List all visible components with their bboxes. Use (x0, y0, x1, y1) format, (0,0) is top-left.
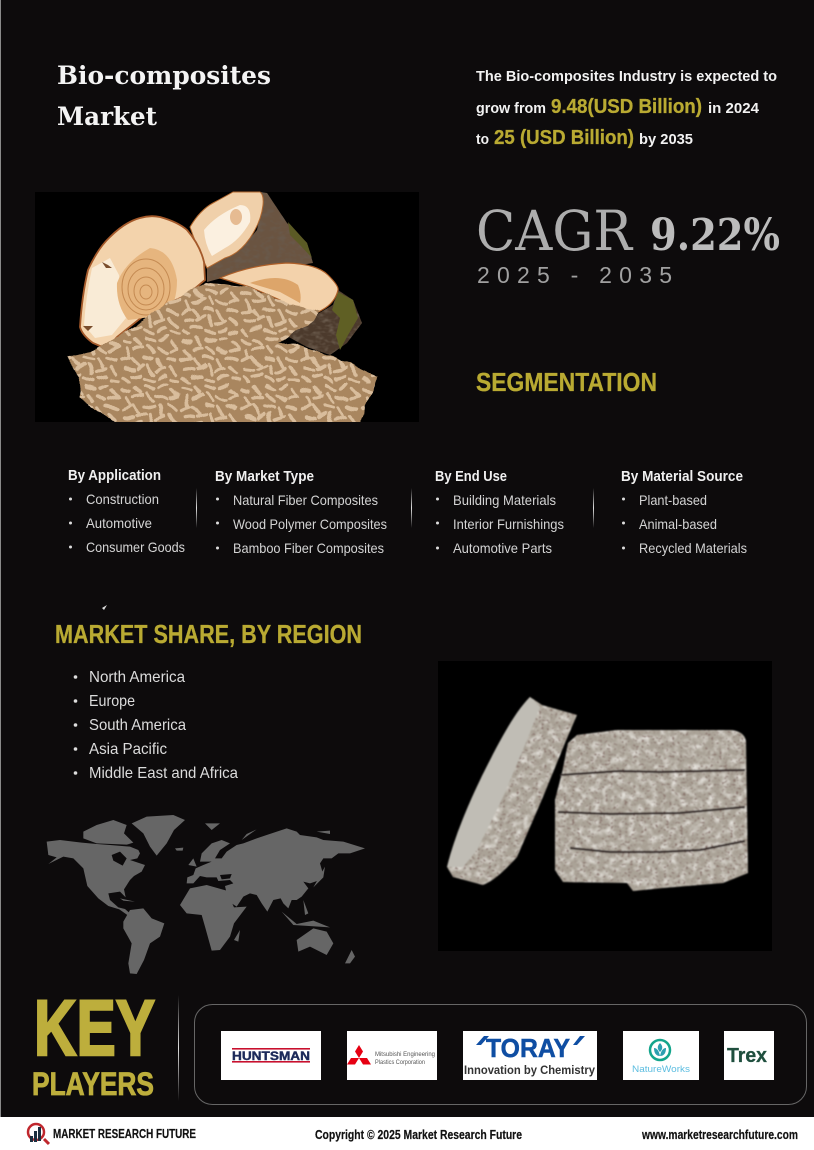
market size statement: to (476, 131, 489, 148)
logo: Mitsubishi Engineering Plastics (347, 1031, 437, 1080)
segment: by application: Consumer Goods (86, 539, 185, 555)
segment: by application (68, 467, 185, 555)
logo: Trex (724, 1031, 774, 1080)
segment: by material source: By Material Source (621, 468, 743, 485)
segment: by material source: Plant-based (639, 492, 707, 508)
segment: by material source: Recycled Materials (639, 540, 747, 556)
world map (47, 815, 365, 974)
segment: by end use: Interior Furnishings (453, 516, 564, 532)
footer: MARKET RESEARCH FUTURE (53, 1127, 196, 1141)
heading: market share by region: MARKET SHARE, BY REGION (55, 619, 362, 649)
key players panel (194, 1004, 806, 1104)
region list: Asia Pacific (89, 741, 167, 758)
icon: market research future (28, 1124, 49, 1144)
logo: Toray: TORAY (486, 1033, 570, 1063)
market size statement: 25 (USD Billion) (494, 127, 634, 149)
segment: by end use: By End Use (435, 468, 507, 485)
segment: by market type: Wood Polymer Composites (233, 516, 387, 532)
segment: by application: Automotive (86, 515, 152, 531)
region list: South America (89, 717, 186, 734)
logo: Huntsman (221, 1031, 321, 1080)
heading: segmentation: SEGMENTATION (476, 367, 657, 397)
segment: by market type: By Market Type (215, 468, 314, 485)
footer (0, 1117, 814, 1150)
market size statement: by 2035 (639, 131, 693, 148)
region list: Middle East and Africa (89, 765, 238, 782)
key players heading: PLAYERS (32, 1066, 154, 1102)
left log slice (80, 216, 205, 349)
market size statement: 9.48(USD Billion) (551, 96, 702, 118)
segment: by market type (215, 468, 387, 556)
image: wood logs and pellets (35, 190, 425, 434)
market size statement: grow from (476, 100, 546, 117)
logo: Mitsubishi Engineering Plastics: Plastics Corporation (375, 1060, 425, 1066)
market size statement: The Bio-composites Industry is expected to (476, 68, 777, 85)
market size statement: in 2024 (708, 100, 760, 117)
stacked discs (550, 725, 755, 895)
logo: Toray: Innovation by Chemistry (464, 1065, 596, 1077)
segment: by end use: Building Materials (453, 492, 556, 508)
logo: Huntsman: HUNTSMAN (232, 1051, 310, 1063)
right log (220, 263, 365, 357)
region list: North America (89, 669, 185, 686)
leaning disc (445, 695, 580, 890)
segment: by market type: Natural Fiber Composites (233, 492, 378, 508)
market size statement (476, 68, 777, 149)
logo: NatureWorks (623, 1031, 699, 1080)
segment: by end use (435, 468, 564, 556)
segment: by end use: Automotive Parts (453, 540, 552, 556)
upper log (190, 190, 320, 285)
region list (74, 669, 238, 782)
CAGR figure: 9.22% (650, 210, 780, 261)
title (57, 61, 271, 131)
title: Market (57, 102, 157, 131)
segmentation columns (68, 467, 747, 556)
CAGR figure: 2025 - 2035 (477, 262, 672, 288)
CAGR figure: CAGR (476, 199, 633, 263)
segment: by market type: Bamboo Fiber Composites (233, 540, 384, 556)
segment: by application: By Application (68, 467, 161, 484)
key players heading (32, 983, 155, 1102)
logo: Trex: Trex (727, 1045, 767, 1067)
logo: NatureWorks: NatureWorks (632, 1064, 690, 1075)
CAGR figure (476, 199, 780, 288)
segment: by application: Construction (86, 491, 159, 507)
pellet pile (66, 282, 378, 426)
region list: Europe (89, 693, 135, 710)
logo: Toray (463, 1031, 597, 1080)
footer: Copyright © 2025 Market Research Future (315, 1128, 522, 1142)
image: bio-composite discs (438, 661, 772, 951)
title: Bio-composites (57, 61, 271, 90)
logo: Mitsubishi Engineering Plastics: Mitsubishi Engineering (375, 1052, 435, 1058)
segment: by material source (621, 468, 747, 556)
key players heading: KEY (34, 983, 155, 1072)
segment: by material source: Animal-based (639, 516, 717, 532)
